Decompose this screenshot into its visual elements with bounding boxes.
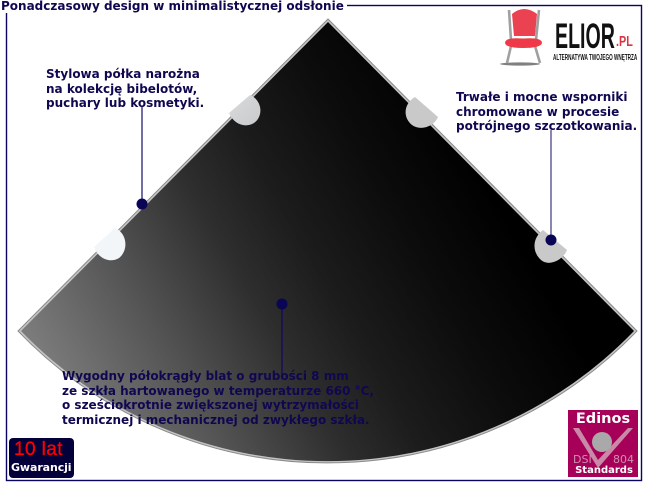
warranty years: 10 lat bbox=[14, 439, 63, 460]
text: shelf style bbox=[46, 67, 204, 110]
bracket: top right bbox=[406, 97, 438, 128]
text: shelf style: na kolekcję bibelotów, bbox=[46, 82, 197, 96]
text: brackets: Trwałe i mocne wsporniki bbox=[456, 90, 627, 104]
text: brackets bbox=[456, 90, 637, 133]
text: shelf style: Stylowa półka narożna bbox=[46, 67, 200, 81]
text: shelf style: puchary lub kosmetyki. bbox=[46, 96, 204, 110]
badge code: DSI bbox=[573, 453, 592, 466]
text: brackets: chromowane w procesie bbox=[456, 105, 619, 119]
badge emblem bbox=[573, 428, 633, 468]
text: brackets: potrójnego szczotkowania. bbox=[456, 119, 637, 133]
badge code: 804 bbox=[613, 453, 634, 466]
logo: Elior bbox=[500, 9, 638, 66]
text: glass top: Wygodny półokrągły blat o grubości 8 mm bbox=[62, 369, 349, 383]
bracket: bottom left bbox=[94, 228, 125, 260]
leader: glass top bbox=[276, 298, 288, 376]
leader: brackets bbox=[546, 130, 556, 246]
badge code bbox=[573, 453, 634, 466]
text: glass top: ze szkła hartowanego w temperaturze 660 °C, bbox=[62, 384, 374, 398]
warranty label: Gwarancji bbox=[11, 461, 71, 474]
logo wordmark: ELIOR bbox=[554, 17, 614, 56]
text: glass top: o sześciokrotnie zwiększonej wytrzymałości bbox=[62, 398, 359, 412]
badge: 10 year warranty bbox=[9, 438, 74, 478]
bracket: bottom right bbox=[534, 230, 567, 263]
text: glass top: termicznej i mechanicznej od zwykłego szkła. bbox=[62, 413, 370, 427]
leader: shelf style bbox=[136, 106, 148, 210]
badge name: Edinos bbox=[576, 411, 630, 427]
badge: Edinos standards bbox=[568, 410, 638, 477]
bracket: top left bbox=[229, 95, 260, 125]
badge caption: Standards bbox=[575, 465, 633, 476]
text: glass top bbox=[62, 369, 374, 427]
logo tagline: ALTERNATYWA TWOJEGO WNĘTRZA bbox=[553, 53, 637, 62]
logo domain: .PL bbox=[616, 33, 633, 50]
icon: red chair bbox=[500, 9, 542, 66]
